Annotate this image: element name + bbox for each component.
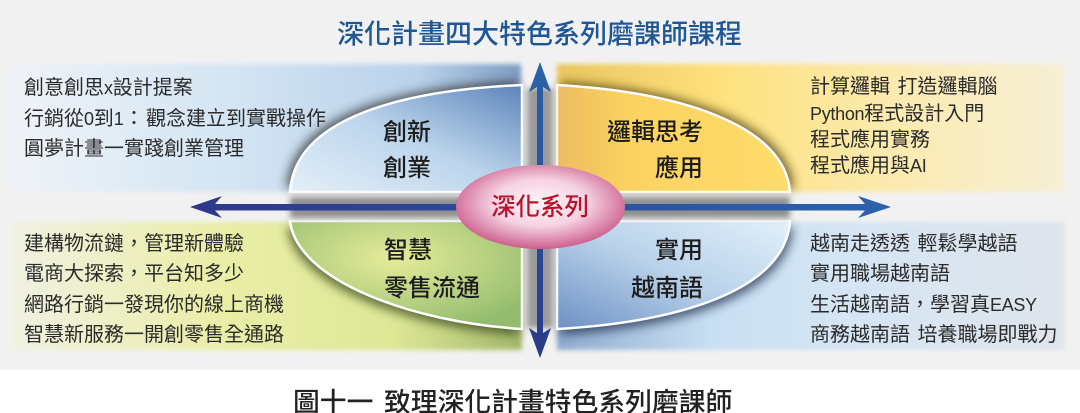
lens: 創新創業 bbox=[290, 85, 522, 192]
panel: top-left bbox=[10, 64, 522, 192]
text block: bottom-right list: 商務越南語 培養職場即戰力 bbox=[810, 323, 1058, 346]
lens label: 邏輯思考應用: 邏輯思考 bbox=[607, 119, 703, 146]
text block: top-left list bbox=[24, 76, 326, 160]
lens: 邏輯思考應用 bbox=[557, 85, 790, 192]
lens label: 創新創業 bbox=[383, 119, 431, 182]
lens label: 實用越南語: 越南語 bbox=[631, 275, 703, 302]
panel: bottom-left bbox=[12, 221, 522, 350]
text block: bottom-left list bbox=[24, 232, 284, 346]
panel: bottom-right bbox=[557, 221, 1065, 350]
text block: bottom-right list: 生活越南語，學習真EASY bbox=[810, 293, 1037, 316]
lens label: 智慧零售流通 bbox=[384, 237, 480, 302]
text block: top-left list: 圓夢計畫一實踐創業管理 bbox=[24, 137, 244, 160]
text block: top-left list: 創意創思x設計提案 bbox=[24, 76, 193, 99]
lens label: 邏輯思考應用: 應用 bbox=[655, 154, 703, 182]
text block: bottom-right list bbox=[810, 232, 1058, 346]
lens label: 智慧零售流通: 零售流通 bbox=[384, 275, 480, 302]
text block: top-right list: 計算邏輯 打造邏輯腦 bbox=[810, 75, 998, 98]
arrow: horizontal bbox=[190, 196, 891, 218]
title: 深化計畫四大特色系列磨課師課程 bbox=[337, 20, 742, 50]
lens label: 創新創業: 創新 bbox=[383, 119, 431, 146]
text block: top-right list: Python程式設計入門 bbox=[810, 102, 984, 125]
text block: bottom-right list: 越南走透透 輕鬆學越語 bbox=[810, 232, 1018, 255]
text block: bottom-left list: 電商大探索，平台知多少 bbox=[24, 262, 244, 285]
text block: top-right list bbox=[810, 75, 998, 177]
lens label: 邏輯思考應用 bbox=[607, 119, 703, 182]
lens: 實用越南語 bbox=[557, 221, 790, 329]
text block: bottom-right list: 實用職場越南語 bbox=[810, 262, 950, 285]
text block: bottom-left list: 網路行銷一發現你的線上商機 bbox=[24, 293, 284, 316]
center oval: 深化系列 bbox=[491, 193, 589, 221]
channel shadows bbox=[290, 88, 790, 328]
text block: top-left list: ： bbox=[124, 108, 144, 130]
text block: top-right list: 程式應用實務 bbox=[810, 127, 930, 151]
lens label: 智慧零售流通: 智慧 bbox=[384, 237, 432, 264]
text block: top-left list: 觀念建立到實戰操作 bbox=[146, 107, 326, 130]
text block: top-left list: 行銷從0到1 bbox=[24, 108, 123, 130]
center oval bbox=[456, 165, 625, 249]
lens label: 實用越南語 bbox=[631, 237, 703, 302]
text block: bottom-left list: 智慧新服務一開創零售全通路 bbox=[24, 323, 284, 346]
panel: top-right bbox=[557, 64, 1065, 192]
lens label: 實用越南語: 實用 bbox=[655, 237, 703, 264]
text block: bottom-left list: 建構物流鏈，管理新體驗 bbox=[24, 232, 244, 255]
text block: top-right list: 程式應用與AI bbox=[810, 153, 926, 177]
lens label: 創新創業: 創業 bbox=[383, 155, 431, 182]
lens: 智慧零售流通 bbox=[290, 221, 522, 329]
arrow: vertical bbox=[529, 62, 551, 358]
